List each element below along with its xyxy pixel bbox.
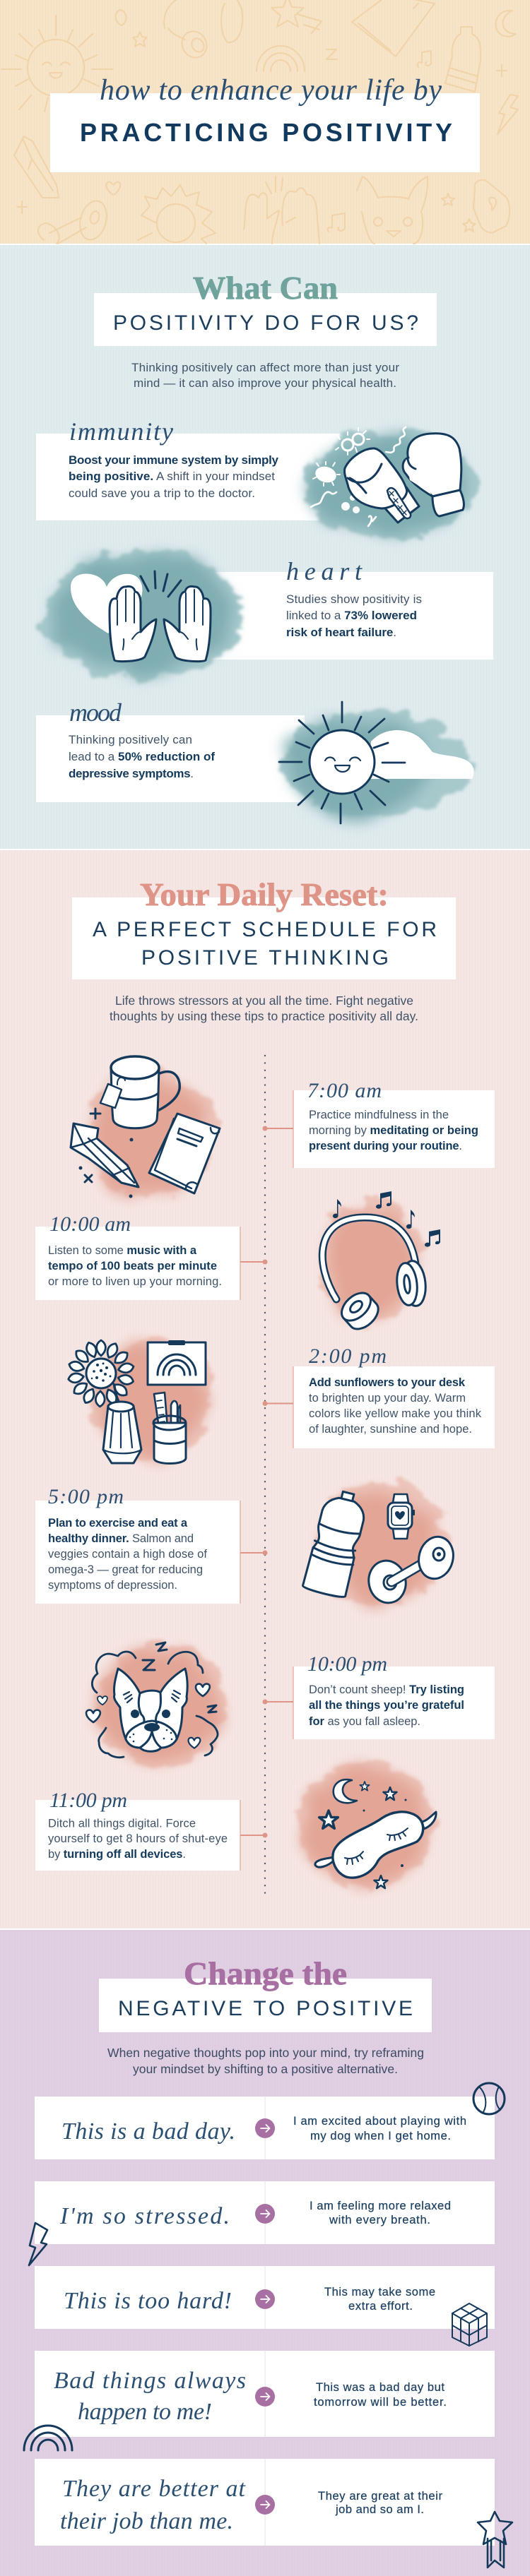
thought cloud outlines	[92, 1652, 218, 1758]
section header box	[99, 1979, 432, 2032]
row: stressed	[35, 2181, 495, 2244]
body text: omega-3 — great for reducing	[48, 1563, 203, 1576]
icon: water bottle	[302, 1488, 370, 1599]
positive thought: my dog when I get home.	[310, 2130, 451, 2142]
subheading	[93, 918, 437, 970]
intro text	[131, 361, 399, 390]
positive thought	[293, 2115, 466, 2142]
icon: art print	[148, 1340, 206, 1385]
immunity text: could save you a trip to the doctor.	[69, 487, 255, 500]
positive thought: This may take some	[324, 2286, 435, 2298]
icon: crystal	[71, 1123, 139, 1187]
panel: your daily reset	[0, 850, 530, 1928]
heart text: Studies show positivity is	[286, 592, 422, 606]
icon: sleep mask	[315, 1812, 436, 1878]
icon: rainbow	[24, 2426, 72, 2450]
subheading: NEGATIVE TO POSITIVE	[118, 1997, 413, 2020]
icon: high five with heart	[45, 551, 242, 678]
negative thought: This is too hard!	[64, 2288, 232, 2314]
body text: all the things you’re grateful	[309, 1699, 464, 1712]
card: immunity	[36, 417, 478, 538]
positive thought	[324, 2286, 435, 2313]
body text: yourself to get 8 hours of shut-eye	[48, 1832, 228, 1845]
script label: heart: heart	[286, 557, 363, 585]
positive thought	[314, 2381, 447, 2409]
arrow	[255, 2289, 275, 2309]
connector	[265, 1128, 293, 1129]
heading: Change the: Change the	[184, 1955, 347, 1991]
row: bad things	[35, 2351, 495, 2437]
icon: lightning bolt	[29, 2223, 47, 2265]
body text: Plan to exercise and eat a	[48, 1517, 188, 1530]
immunity text: Boost your immune system by simply	[69, 453, 279, 467]
intro text: Life throws stressors at you all the time. Fight negative	[115, 994, 413, 1008]
body text	[309, 1683, 464, 1728]
card	[35, 1800, 240, 1871]
timeline item: 5:00 pm	[35, 1485, 267, 1604]
sleeping Z letters	[143, 1642, 216, 1712]
icon: notebook	[149, 1114, 220, 1193]
negative thought	[54, 2368, 246, 2425]
connector	[240, 1835, 265, 1836]
script time: 7:00 am	[307, 1079, 382, 1102]
subheading: A PERFECT SCHEDULE FOR	[93, 918, 437, 941]
body text: by turning off all devices.	[48, 1848, 186, 1861]
mood text: depressive symptoms.	[69, 767, 194, 780]
intro text: mind — it can also improve your physical health.	[134, 376, 396, 390]
connector	[240, 1552, 265, 1554]
mood text	[69, 733, 215, 780]
timeline dotted line	[264, 1056, 266, 1895]
icon: dog head	[114, 1669, 187, 1751]
connector	[240, 1261, 265, 1263]
subheading: POSITIVITY DO FOR US?	[113, 311, 418, 335]
card	[35, 1501, 240, 1604]
negative thought: This is a bad day.	[61, 2118, 235, 2145]
icon: baseball	[473, 2083, 505, 2114]
timeline item: 7:00 am	[263, 1079, 495, 1168]
body text: or more to liven up your morning.	[48, 1275, 222, 1288]
body text	[48, 1818, 228, 1861]
positive thought: This was a bad day but	[316, 2381, 444, 2394]
timeline item: 10:00 am	[35, 1212, 267, 1300]
script time: 11:00 pm	[49, 1789, 127, 1812]
panel: hero header	[0, 0, 530, 244]
body text: of laughter, sunshine and hope.	[309, 1423, 472, 1436]
icon: vase	[103, 1384, 141, 1463]
body text: Practice mindfulness in the	[309, 1109, 449, 1121]
icon: star ribbon	[478, 2512, 512, 2568]
negative thought: their job than me.	[60, 2508, 233, 2534]
body text: for as you fall asleep.	[309, 1715, 420, 1728]
intro text: Thinking positively can affect more than just your	[131, 361, 399, 374]
body text: colors like yellow make you think	[309, 1407, 482, 1420]
positive thought: They are great at their	[318, 2490, 442, 2503]
main title: PRACTICING POSITIVITY	[80, 118, 452, 147]
illustration: sleep mask, moon and stars	[297, 1761, 436, 1888]
intro text	[107, 2046, 424, 2076]
illustration: sunflower, vase, art print and pencil cup	[68, 1339, 212, 1463]
body text	[309, 1376, 482, 1436]
positive thought: with every breath.	[329, 2214, 430, 2226]
heart text	[286, 592, 422, 639]
stars	[319, 1782, 407, 1888]
icon: left hand	[110, 586, 156, 662]
small hearts	[86, 1684, 210, 1748]
positive thought: I am excited about playing with	[293, 2115, 466, 2128]
icon: moon	[334, 1779, 357, 1803]
negative thought: I'm so stressed.	[59, 2203, 230, 2229]
mood text: lead to a 50% reduction of	[69, 750, 215, 763]
heading: What Can: What Can	[193, 270, 338, 306]
immunity text	[69, 453, 279, 500]
body text: Listen to some music with a	[48, 1244, 197, 1257]
heading: Your Daily Reset: Your Daily Reset:	[140, 876, 389, 912]
heart text: linked to a 73% lowered	[286, 609, 417, 622]
row: too hard	[35, 2266, 495, 2329]
positive thought: job and so am I.	[335, 2503, 424, 2516]
icon: dumbbell	[365, 1533, 458, 1606]
subheading: POSITIVE THINKING	[141, 946, 389, 970]
body text: Ditch all things digital. Force	[48, 1818, 196, 1830]
icon: smartwatch	[388, 1494, 415, 1539]
body text: morning by meditating or being	[309, 1124, 478, 1137]
card	[35, 1227, 240, 1300]
script label: mood: mood	[69, 698, 122, 727]
positive thought	[318, 2490, 442, 2516]
arrow	[255, 2118, 275, 2138]
script time: 10:00 am	[49, 1212, 131, 1236]
negative thought: Bad things always	[54, 2368, 246, 2394]
script time: 5:00 pm	[48, 1485, 124, 1508]
positive thought: tomorrow will be better.	[314, 2396, 447, 2409]
intro text: When negative thoughts pop into your mind, try reframing	[107, 2046, 424, 2060]
body text: tempo of 100 beats per minute	[48, 1260, 217, 1272]
illustration: water bottle, smartwatch and dumbbell	[302, 1483, 458, 1606]
negative thought	[60, 2476, 247, 2534]
panel: what can positivity do for us	[0, 245, 530, 849]
timeline item: 11:00 pm	[35, 1789, 267, 1871]
body text: present during your routine.	[309, 1140, 462, 1152]
script time: 2:00 pm	[309, 1344, 387, 1368]
body text: to brighten up your day. Warm	[309, 1392, 466, 1405]
section header box	[72, 898, 456, 979]
body text: symptoms of depression.	[48, 1579, 177, 1592]
connector	[265, 1701, 293, 1703]
intro text: thoughts by using these tips to practice positivity all day.	[110, 1009, 418, 1023]
body text: Don’t count sheep! Try listing	[309, 1683, 464, 1696]
icon: puzzle cube	[452, 2303, 487, 2346]
script time: 10:00 pm	[307, 1652, 387, 1676]
connector	[265, 1402, 293, 1404]
decorative doodle line pattern	[1, 0, 518, 244]
intro text	[110, 994, 418, 1023]
body text: Add sunflowers to your desk	[309, 1376, 466, 1389]
card	[293, 1366, 495, 1448]
negative thought: happen to me!	[78, 2399, 212, 2425]
positive thought: I am feeling more relaxed	[310, 2200, 451, 2212]
intro text: your mindset by shifting to a positive alternative.	[133, 2062, 398, 2076]
body text: healthy dinner. Salmon and	[48, 1532, 194, 1545]
icon: left ear cup	[336, 1287, 384, 1335]
card: mood	[36, 698, 474, 823]
heart text: risk of heart failure.	[286, 626, 396, 639]
illustration: headphones and music notes	[320, 1191, 440, 1335]
script heading: how to enhance your life by: how to enhance your life by	[100, 74, 442, 107]
row: bad day	[35, 2097, 495, 2159]
body text	[48, 1517, 207, 1592]
panel: change the negative to positive	[0, 1930, 530, 2576]
section header box	[94, 293, 437, 346]
card: heart	[45, 551, 493, 678]
arrow	[255, 2495, 275, 2515]
arrow	[255, 2387, 275, 2407]
negative thought: They are better at	[62, 2476, 247, 2502]
timeline item: 10:00 pm	[263, 1652, 495, 1739]
immunity text: being positive. A shift in your mindset	[69, 470, 275, 483]
body text: veggies contain a high dose of	[48, 1548, 207, 1561]
mood text: Thinking positively can	[69, 733, 192, 746]
positive thought	[310, 2200, 451, 2226]
title banner	[50, 93, 480, 172]
illustration: sleeping dog	[86, 1642, 226, 1768]
card	[293, 1666, 495, 1739]
script label: immunity: immunity	[69, 417, 173, 446]
arrow	[255, 2204, 275, 2224]
icon: right hand	[164, 586, 211, 662]
illustration: mug, crystal and notebook	[71, 1056, 220, 1198]
card	[293, 1090, 495, 1168]
row: better at their job	[35, 2459, 495, 2546]
body text	[48, 1244, 222, 1288]
icon: boxing gloves with germs	[302, 427, 478, 538]
positive thought: extra effort.	[348, 2300, 413, 2313]
timeline item: 2:00 pm	[263, 1344, 495, 1448]
icon: pencil cup	[153, 1393, 186, 1463]
icon: sunflower	[68, 1340, 134, 1407]
icon: right ear cup	[395, 1260, 428, 1308]
body text	[309, 1109, 478, 1152]
icon: smiling sun and cloud	[279, 702, 474, 823]
